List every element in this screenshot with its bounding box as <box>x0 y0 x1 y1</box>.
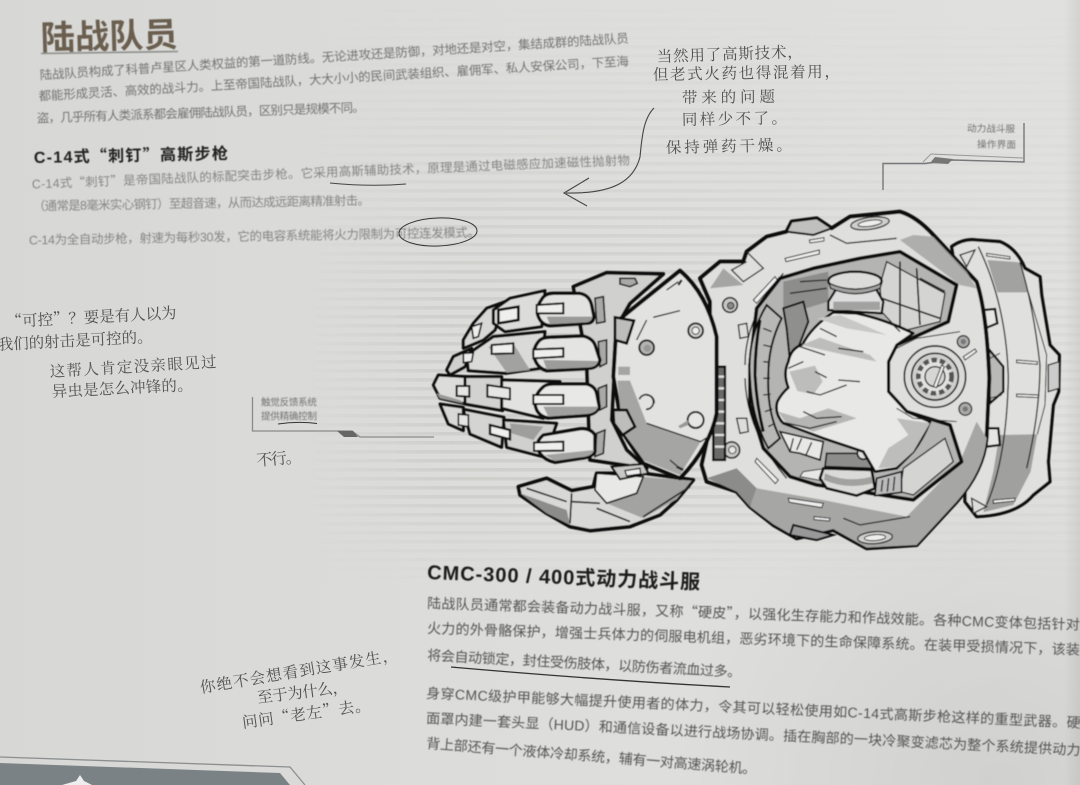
underline: gauss technology <box>330 183 406 185</box>
text block: introduction <box>37 30 629 125</box>
chest dial <box>897 332 977 422</box>
text block: CMC description: 火力的外骨骼保护，增强士兵体力的伺服电机组，恶劣环境下的生命保障系统。在装甲受损情况下，该装 <box>427 620 1080 658</box>
heading: CMC power armor: CMC-300 / 400式动力战斗服 <box>427 561 700 594</box>
inner ring <box>750 302 808 448</box>
striped page pattern <box>386 190 767 533</box>
interior opening <box>750 252 962 500</box>
text block: C-14 description: C-14为全自动步枪，射速为每秒30发，它的电容系统能将火力限制为可控连发模式。 <box>29 225 480 247</box>
finger 1 <box>463 291 594 348</box>
back of hand <box>573 273 663 468</box>
thumb <box>518 464 693 531</box>
finger 2 <box>447 332 600 375</box>
handwritten note: bottom: 至于为什么， <box>256 675 349 708</box>
handwritten note: top right: 当然用了高斯技术， <box>656 40 803 67</box>
callout: haptic feedback system: 触觉反馈系统 <box>261 396 317 408</box>
main armor frame <box>700 212 989 548</box>
handwritten note: controllable: 这帮人肯定没亲眼见过 <box>49 350 217 382</box>
circle: controlled burst mode <box>399 217 477 247</box>
finger 3 <box>433 375 599 418</box>
handwritten note: bottom <box>198 643 399 733</box>
callout: haptic feedback system: 提供精确控制 <box>261 410 317 422</box>
text block: introduction: 陆战队员构成了科普卢星区人类权益的第一道防线。无论进攻还是防御，对地还是对空，集结成群的陆战队员 <box>39 30 629 82</box>
shield plate <box>613 271 717 478</box>
coil connector <box>713 367 725 460</box>
rear cuff <box>952 240 1059 517</box>
text block: introduction: 盗，几乎所有人类派系都会雇佣陆战队员，区别只是规模不同。 <box>37 100 365 125</box>
text block: C-14 description <box>29 150 630 247</box>
handwritten note: controllable: “可控”？要是有人以为 <box>6 301 177 332</box>
handwritten note: controllable: 我们的射击是可控的。 <box>0 325 153 355</box>
handwritten note: top right: 带来的问题 <box>682 85 776 108</box>
front section of the gauntlet <box>433 271 725 531</box>
handwritten note: bottom: 你绝不会想看到这事发生， <box>198 643 399 698</box>
rear section of the gauntlet <box>700 212 1059 548</box>
text block: introduction: 都能形成灵活、高效的战斗力。上至帝国陆战队，大大小小的民间武装组织、雇佣军、私人安保公司，下至海 <box>38 53 629 103</box>
handwritten note: controllable: 异虫是怎么冲锋的。 <box>51 373 193 402</box>
text block: CMC description: 面罩内建一套头显（HUD）和通信设备以进行战场协调。插在胸部的一块冷聚变滤芯为整个系统提供动力 <box>426 710 1080 758</box>
text block: CMC description <box>426 593 1080 777</box>
hand fist <box>776 312 930 472</box>
callout: haptic feedback system <box>252 396 434 437</box>
handwritten note: top right: 保持弹药干燥。 <box>666 133 792 158</box>
finger 4 <box>440 404 595 462</box>
text block: C-14 description: C-14式“刺钉”是帝国陆战队的标配突击步枪。它采用高斯辅助技术，原理是通过电磁感应加速磁性抛射物 <box>31 150 630 192</box>
text block: CMC description: 背上部还有一个液体冷却系统，辅有一对高速涡轮机。 <box>426 735 757 777</box>
cylinder: lower piston <box>820 447 875 496</box>
handwritten note: bottom: 问问“老左”去。 <box>241 693 371 733</box>
callout: armor interface <box>883 123 1024 190</box>
text block: CMC description: 将会自动锁定，封住受伤肢体，以防伤者流血过多。 <box>427 647 742 680</box>
handwritten note: top right <box>653 40 840 158</box>
text block: C-14 description: （通常是8毫米实心钢钉）至超音速，从而达成远距离精准射击。 <box>33 193 370 213</box>
handwritten note: top right: 但老式火药也得混着用， <box>653 60 840 85</box>
bottom-left banner <box>0 757 305 785</box>
handwritten note: top right: 同样少不了。 <box>682 106 787 130</box>
handwritten note: no: 不行。 <box>255 444 302 471</box>
underline: locked limbs sentence <box>451 667 730 687</box>
upper knuckle detail <box>595 278 637 457</box>
title: 陆战队员 <box>40 16 178 58</box>
cylinder: upper piston <box>828 272 883 313</box>
arrow: handwritten note to gauss text <box>564 108 654 206</box>
text block: CMC description: 陆战队员通常都会装备动力战斗服，又称“硬皮”，以强化生存能力和作战效能。各种CMC变体包括针对 <box>427 593 1080 635</box>
heading: C-14 rifle: C-14式“刺钉”高斯步枪 <box>34 140 228 168</box>
callout: armor interface: 操作界面 <box>977 139 1017 151</box>
callout: armor interface: 动力战斗服 <box>967 123 1016 135</box>
text block: CMC description: 身穿CMC级护甲能够大幅提升使用者的体力，令其可以轻松使用如C-14式高斯步枪这样的重型武器。硬 <box>426 685 1080 731</box>
handwritten note: controllable <box>0 301 217 402</box>
illustration: armored gauntlet <box>433 212 1059 548</box>
